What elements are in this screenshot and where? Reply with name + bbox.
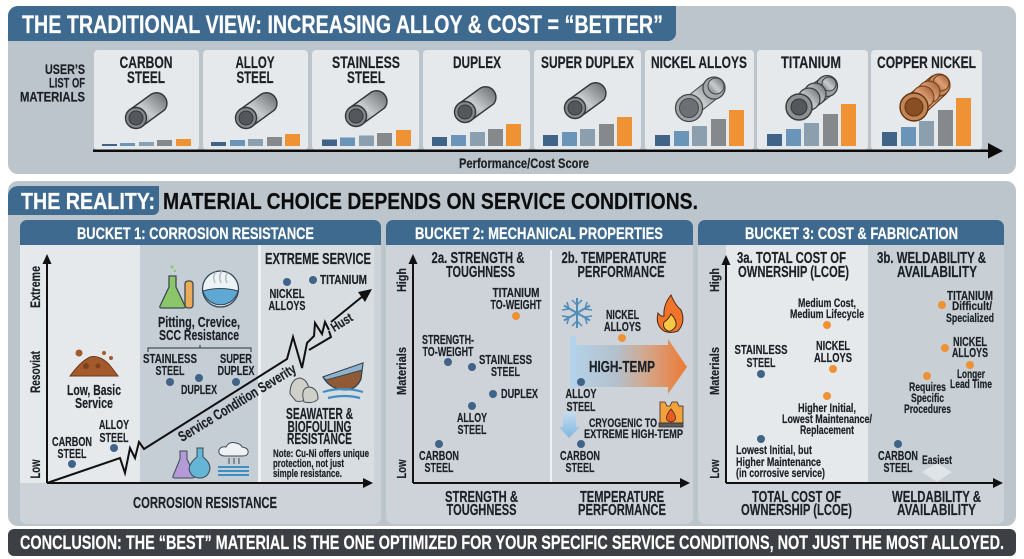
note: cu-ni protection: simple resistance. — [273, 468, 342, 480]
subheading: 3b: AVAILABILITY — [897, 264, 977, 281]
point: stainless steel: STAINLESS — [479, 352, 532, 367]
card: carbon steel: CARBON — [120, 53, 172, 72]
label and point: duplex — [181, 374, 217, 397]
label: pitting crevice scc: SCC Resistance — [159, 327, 239, 344]
point: titanium weldability — [938, 288, 994, 325]
header: bucket 1: BUCKET 1: CORROSION RESISTANCE — [77, 225, 314, 243]
x-axis label: temperature performance — [578, 489, 666, 519]
label and point: stainless steel: STAINLESS — [143, 351, 197, 366]
point: carbon steel — [419, 440, 459, 475]
label and point: nickel alloys: ALLOYS — [268, 298, 306, 313]
label and point: titanium: TITANIUM — [320, 272, 367, 287]
header: bucket 2 — [386, 220, 693, 245]
point: carbon steel weldability: STEEL — [884, 460, 913, 475]
label: service condition severity: Service Condition Severity — [176, 361, 299, 445]
sparkle — [922, 463, 952, 482]
label: cryogenic to extreme high-temp — [584, 416, 683, 441]
point: higher initial — [782, 392, 872, 437]
point: titanium to-weight — [490, 285, 542, 320]
point: stainless steel cost: STEEL — [746, 355, 776, 370]
point: carbon steel temperature: CARBON — [560, 448, 600, 463]
label: seawater biofouling resistance — [286, 406, 353, 448]
label and point: carbon steel — [52, 434, 92, 468]
label and point: carbon steel: STEEL — [58, 446, 87, 461]
point: lowest initial: (in corrosive service) — [736, 466, 825, 480]
card: stainless steel: STEEL — [347, 68, 385, 87]
heading: the reality — [8, 186, 698, 215]
note: cu-ni protection: Note: Cu-Ni offers unique — [273, 448, 369, 460]
point: nickel alloys cost — [814, 338, 852, 373]
point: carbon steel temperature — [560, 440, 600, 475]
point: higher initial: Replacement — [800, 423, 854, 437]
label: seawater biofouling resistance: SEAWATER & — [286, 406, 353, 423]
point: carbon steel weldability — [878, 440, 952, 475]
label: seawater biofouling resistance: BIOFOULING — [288, 419, 352, 436]
subheading: 3a: 3a. TOTAL COST OF — [737, 250, 846, 267]
label: extreme service: EXTREME SERVICE — [265, 251, 371, 268]
subheading: 2b: PERFORMANCE — [578, 264, 664, 281]
y-axis labels: bucket 1 — [27, 266, 43, 478]
y-axis labels: bucket 3: Materials — [707, 347, 722, 395]
label and point: alloy steel: ALLOY — [99, 417, 129, 432]
heading: traditional view: THE TRADITIONAL VIEW: INCREASING ALLOY & COST = “BETTER” — [22, 11, 663, 39]
label: cryogenic to extreme high-temp: EXTREME HIGH-TEMP — [584, 427, 683, 441]
point: alloy steel temperature: STEEL — [566, 399, 596, 414]
label and point: alloy steel — [99, 417, 129, 452]
point: strength-to-weight: TO-WEIGHT — [422, 344, 474, 359]
heading: the reality: THE REALITY: — [21, 188, 155, 214]
y-axis labels: bucket 1: Resoviat — [27, 351, 43, 393]
point: longer lead time — [950, 361, 992, 391]
card: alloy steel: STEEL — [236, 68, 274, 87]
x-axis label: weldability and availability — [892, 489, 981, 519]
card: alloy steel — [203, 50, 308, 150]
label: user's list of materials: USER’S — [45, 61, 85, 77]
y-axis labels: bucket 2: High — [394, 268, 409, 292]
label and point: nickel alloys — [604, 307, 641, 342]
y-axis labels: bucket 2: Materials — [394, 347, 409, 395]
point: requires specific procedures: Specific — [911, 391, 944, 405]
point: titanium to-weight: TO-WEIGHT — [490, 297, 542, 312]
label and point: nickel alloys — [268, 278, 306, 313]
label: seawater biofouling resistance: RESISTANCE — [287, 431, 352, 448]
label and point: super duplex — [218, 351, 255, 386]
card: nickel alloys: NICKEL ALLOYS — [651, 53, 747, 72]
x-axis label: strength and toughness: TOUGHNESS — [446, 502, 516, 519]
axes: bucket 1 — [42, 254, 373, 488]
point: titanium to-weight: TITANIUM — [492, 285, 540, 300]
point: nickel alloys weldability: NICKEL — [953, 334, 987, 349]
y-axis labels: bucket 2 — [394, 268, 409, 478]
x-axis label: strength and toughness: STRENGTH & — [445, 489, 518, 506]
panel: the reality — [8, 181, 1016, 526]
icon: corroded rust pile — [70, 350, 118, 376]
subheading: 2a — [432, 250, 524, 281]
subheading: 3b — [877, 250, 986, 281]
panel: bucket 3 cost and fabrication — [698, 220, 1004, 524]
label: user's list of materials — [20, 61, 85, 104]
point: duplex: DUPLEX — [501, 386, 538, 401]
label: pitting crevice scc: Pitting, Crevice, — [158, 314, 240, 331]
icon: lab flasks — [173, 448, 210, 478]
icon: barnacles — [290, 378, 318, 403]
x-axis label: temperature performance: TEMPERATURE — [580, 489, 664, 506]
card: carbon steel — [94, 50, 199, 150]
x-axis label: total cost of ownership: OWNERSHIP (LCOE) — [741, 502, 852, 519]
point: stainless steel cost — [734, 342, 788, 378]
point: stainless steel cost: STAINLESS — [734, 342, 788, 357]
x-axis label: weldability and availability: WELDABILITY & — [892, 489, 981, 506]
label: low basic service — [67, 382, 121, 412]
card: titanium: TITANIUM — [781, 53, 841, 72]
label: hust: Hust — [328, 309, 356, 335]
icon: cloud rain over water — [218, 442, 249, 475]
label and point: stainless steel — [143, 351, 197, 386]
x-axis label: strength and toughness — [445, 489, 518, 519]
y-axis labels: bucket 1: Extreme — [27, 266, 43, 308]
icon: flame — [657, 295, 683, 332]
point: titanium weldability: Difficult/ — [952, 299, 993, 313]
point: duplex — [489, 386, 538, 401]
point: alloy steel: ALLOY — [457, 410, 487, 425]
label and point: nickel alloys: NICKEL — [606, 307, 639, 322]
axes: bucket 2 — [408, 254, 690, 488]
axis: performance cost score — [93, 143, 1003, 171]
axes: bucket 3 — [722, 255, 1003, 488]
label and point: super duplex: DUPLEX — [218, 363, 255, 378]
icon: chemistry flask and test tube — [160, 266, 193, 308]
header: bucket 3: BUCKET 3: COST & FABRICATION — [745, 225, 958, 243]
point: longer lead time: Lead Time — [950, 377, 992, 391]
label: user's list of materials: MATERIALS — [20, 88, 85, 104]
heading: traditional view — [8, 6, 676, 41]
point: stainless steel: STEEL — [491, 364, 520, 379]
y-axis labels: bucket 1: Low — [27, 459, 43, 478]
label and point: super duplex: SUPER — [220, 351, 252, 366]
point: medium cost — [790, 296, 864, 329]
icon: furnace — [659, 402, 683, 427]
heading: the reality: MATERIAL CHOICE DEPENDS ON SERVICE CONDITIONS. — [163, 188, 698, 214]
x-axis label: weldability and availability: AVAILABILITY — [897, 502, 976, 519]
axis: performance cost score: Performance/Cost Score — [459, 155, 589, 171]
card: nickel alloys — [645, 50, 754, 150]
point: medium cost: Medium Lifecycle — [790, 307, 864, 321]
point: carbon steel: STEEL — [424, 460, 454, 475]
point: medium cost: Medium Cost, — [798, 296, 856, 310]
panel: bucket 1 corrosion resistance — [20, 220, 381, 524]
label and point: alloy steel: STEEL — [100, 430, 129, 445]
point: higher initial: Higher Initial, — [798, 401, 856, 415]
point: nickel alloys cost: NICKEL — [816, 338, 850, 353]
point: nickel alloys weldability: ALLOYS — [952, 345, 988, 360]
card: stainless steel: STAINLESS — [332, 53, 400, 72]
point: alloy steel — [457, 402, 487, 437]
label and point: titanium — [309, 272, 367, 287]
point: alloy steel temperature — [566, 378, 597, 414]
point: nickel alloys weldability — [941, 334, 988, 360]
y-axis labels: bucket 3 — [707, 268, 722, 478]
icon: snowflake — [562, 298, 592, 328]
point: requires specific procedures — [904, 372, 951, 416]
subheading: 2a: 2a. STRENGTH & — [432, 250, 524, 267]
point: longer lead time: Longer — [957, 367, 985, 381]
label and point: nickel alloys: NICKEL — [270, 286, 305, 301]
y-axis labels: bucket 2: Low — [394, 459, 409, 478]
card: super duplex — [534, 50, 641, 150]
point: requires specific procedures: Requires — [909, 380, 946, 394]
point: carbon steel weldability: Easiest — [922, 453, 952, 467]
note: cu-ni protection: protection, not just — [273, 458, 344, 470]
card: copper nickel — [871, 50, 982, 150]
label: pitting crevice scc — [158, 314, 240, 344]
point: alloy steel temperature: ALLOY — [566, 386, 597, 401]
panel: bucket 2 mechanical properties — [386, 220, 693, 524]
point: strength-to-weight — [422, 332, 474, 366]
label: low basic service: Low, Basic — [67, 382, 121, 399]
subheading: 3a — [737, 250, 849, 281]
point: strength-to-weight: STRENGTH- — [422, 332, 474, 347]
icon: water and steam circle — [202, 271, 238, 307]
x-axis label: total cost of ownership: TOTAL COST OF — [752, 489, 841, 506]
label and point: duplex: DUPLEX — [181, 382, 217, 397]
point: stainless steel — [468, 352, 532, 379]
card: alloy steel: ALLOY — [236, 53, 275, 72]
point: requires specific procedures: Procedures — [904, 402, 951, 416]
point: carbon steel weldability: CARBON — [878, 448, 918, 463]
label and point: carbon steel: CARBON — [52, 434, 92, 449]
subheading: 3b: 3b. WELDABILITY & — [877, 250, 986, 267]
card: carbon steel: STEEL — [127, 68, 165, 87]
card: super duplex: SUPER DUPLEX — [541, 53, 634, 72]
point: lowest initial: Lowest Initial, but — [736, 443, 812, 457]
point: lowest initial: Higher Maintenance — [736, 455, 821, 469]
point: carbon steel: CARBON — [419, 448, 459, 463]
x-axis label: total cost of ownership — [741, 489, 852, 519]
header: bucket 3 — [698, 220, 1004, 245]
point: nickel alloys cost: ALLOYS — [814, 350, 852, 365]
point: carbon steel temperature: STEEL — [566, 460, 595, 475]
subheading: 2b: 2b. TEMPERATURE — [562, 250, 666, 267]
header: bucket 1 — [20, 220, 381, 245]
label: low basic service: Service — [75, 395, 113, 412]
subheading: 2a: TOUGHNESS — [446, 264, 515, 281]
card: duplex: DUPLEX — [453, 53, 501, 72]
point: titanium weldability: TITANIUM — [947, 288, 993, 303]
arrow: high-temp gradient: HIGH-TEMP — [589, 359, 655, 376]
label: user's list of materials: LIST OF — [49, 74, 85, 90]
y-axis labels: bucket 3: Low — [707, 459, 722, 478]
arrow: cryogenic down — [559, 412, 580, 438]
panel: traditional view — [8, 6, 1016, 174]
subheading: 3a: OWNERSHIP (LCOE) — [738, 264, 849, 281]
point: alloy steel: STEEL — [458, 422, 487, 437]
header: bucket 2: BUCKET 2: MECHANICAL PROPERTIES — [415, 225, 663, 243]
subheading: 2b — [562, 250, 666, 281]
point: lowest initial — [736, 435, 825, 480]
label and point: stainless steel: STEEL — [156, 363, 185, 378]
x-axis label: corrosion resistance: CORROSION RESISTANCE — [133, 495, 277, 512]
card: stainless steel — [312, 50, 419, 150]
point: higher initial: Lowest Maintenance/ — [782, 412, 872, 426]
line: service condition severity trend — [47, 289, 372, 483]
label: cryogenic to extreme high-temp: CRYOGENIC TO — [589, 416, 657, 430]
label and point: nickel alloys: ALLOYS — [604, 319, 641, 334]
card: duplex — [423, 50, 530, 150]
point: titanium weldability: Specialized — [946, 311, 994, 325]
y-axis labels: bucket 3: High — [707, 268, 722, 292]
note: cu-ni protection — [273, 448, 369, 480]
x-axis label: temperature performance: PERFORMANCE — [578, 502, 666, 519]
arrow: high-temp gradient — [570, 336, 687, 394]
card: titanium — [757, 50, 868, 150]
card: copper nickel: COPPER NICKEL — [877, 53, 976, 72]
icon: ship hull in water — [323, 363, 363, 398]
